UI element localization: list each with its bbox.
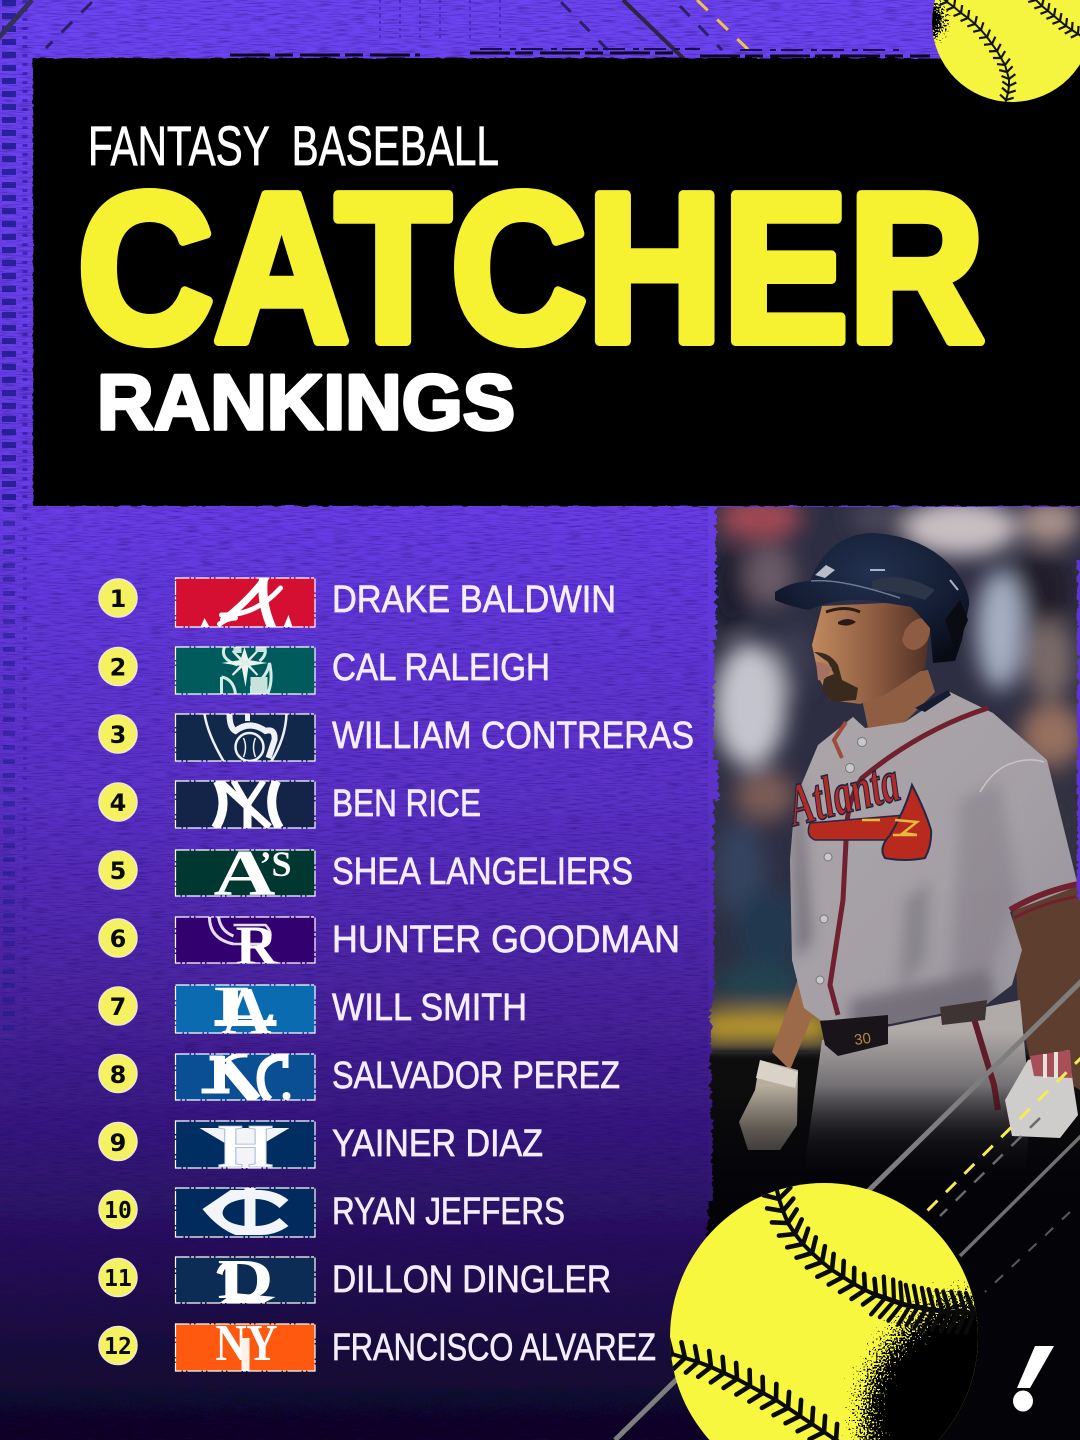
row 6: 6 [110, 925, 126, 953]
logo: Dodgers [176, 973, 315, 1049]
row 6: HUNTER GOODMAN [332, 919, 680, 961]
neck and face [812, 602, 951, 728]
logo: Mets [176, 1315, 315, 1372]
row 12 [99, 1315, 656, 1372]
tomahawk [808, 785, 931, 860]
photo fade to black [700, 1085, 1080, 1195]
helmet [775, 533, 969, 663]
row 2: CAL RALEIGH [332, 647, 550, 689]
large baseball [660, 1183, 990, 1440]
row 7: WILL SMITH [332, 987, 527, 1029]
logo: Mariners [176, 647, 315, 694]
belt [820, 1000, 987, 1056]
logo: Rockies: R [236, 915, 278, 977]
logo: Athletics [176, 837, 315, 910]
row 4: BEN RICE [332, 783, 481, 825]
panel texture [0, 507, 708, 1440]
jersey shading [792, 760, 1044, 1040]
jersey buttons [816, 738, 866, 984]
photo right edge flecks [1077, 560, 1080, 900]
row 11 [99, 1249, 611, 1311]
speed lines over photo [615, 963, 1080, 1440]
row 1 [99, 578, 616, 627]
row 10: RYAN JEFFERS [332, 1191, 565, 1233]
row 8: 8 [110, 1061, 126, 1089]
logo: Athletics: ’S [260, 844, 292, 884]
logo: Yankees [176, 781, 315, 828]
ear [902, 618, 930, 650]
row 2: 2 [110, 654, 126, 682]
left panel rough edge [0, 507, 718, 1440]
brand logo: exclamation mark [1013, 1346, 1054, 1412]
jersey piping [830, 708, 1080, 1015]
right glove [1005, 1050, 1078, 1138]
row 5 [99, 837, 633, 910]
row 3: WILLIAM CONTRERAS [332, 715, 694, 757]
title: rankings: RANKINGS [97, 358, 515, 446]
jersey [790, 692, 1078, 1024]
row 11: 11 [104, 1266, 132, 1292]
logo: Astros: H [218, 1113, 274, 1181]
logo: Braves [176, 578, 315, 627]
row 3 [99, 714, 694, 761]
row 5: SHEA LANGELIERS [332, 851, 633, 893]
row 7 [99, 973, 527, 1049]
row 2 [99, 647, 550, 694]
row 6 [99, 915, 680, 977]
collar [915, 690, 951, 712]
pants piping [972, 1012, 998, 1110]
logo: Brewers [176, 714, 315, 761]
row 1: 1 [110, 585, 126, 613]
logo: Tigers [176, 1249, 315, 1311]
title: catcher: CATCHER [78, 149, 984, 386]
logo: Twins [176, 1188, 315, 1237]
title: fantasy baseball: FANTASY BASEBALL [88, 114, 499, 177]
row 8: SALVADOR PEREZ [332, 1055, 620, 1097]
belt: 30 [853, 1030, 872, 1049]
logo: Astros [176, 1113, 315, 1181]
row 10 [99, 1188, 565, 1237]
row 11: DILLON DINGLER [332, 1259, 611, 1301]
header black panel [33, 49, 1080, 506]
player photo [690, 496, 1080, 1440]
eye [838, 619, 856, 626]
logo: Dodgers: A [222, 973, 272, 1049]
lips [816, 662, 832, 680]
blurred crowd [700, 507, 1080, 1184]
logo: Royals [176, 1054, 315, 1100]
row 5: 5 [110, 857, 126, 885]
row 3: 3 [110, 721, 126, 749]
row 9: YAINER DIAZ [332, 1123, 543, 1165]
rankings list [99, 578, 694, 1372]
top speed lines [0, 0, 759, 60]
logo: Tigers: D [218, 1249, 274, 1311]
logo: Mets: NY [216, 1315, 278, 1372]
left edge texture [9, 507, 25, 1100]
row 1: DRAKE BALDWIN [332, 579, 616, 621]
row 7: 7 [110, 993, 126, 1021]
row 12: 12 [104, 1334, 132, 1360]
logo: Dodgers: L [214, 974, 278, 1039]
row 4: 4 [110, 789, 126, 817]
row 8 [99, 1054, 620, 1100]
goatee [814, 652, 858, 702]
row 12: FRANCISCO ALVAREZ [332, 1327, 656, 1369]
logo: Athletics: A [214, 837, 276, 910]
Atlanta script: Atlanta [779, 747, 906, 839]
top-right baseball [930, 0, 1080, 106]
left arm and glove [739, 980, 813, 1150]
row 10: 10 [104, 1198, 132, 1224]
row 4 [99, 781, 481, 828]
lower black backdrop [700, 1192, 1080, 1440]
row 9: 9 [110, 1129, 126, 1157]
pants [808, 1000, 1028, 1150]
row 9 [99, 1113, 543, 1181]
right forearm [1012, 880, 1080, 1090]
logo: Rockies [176, 915, 315, 977]
